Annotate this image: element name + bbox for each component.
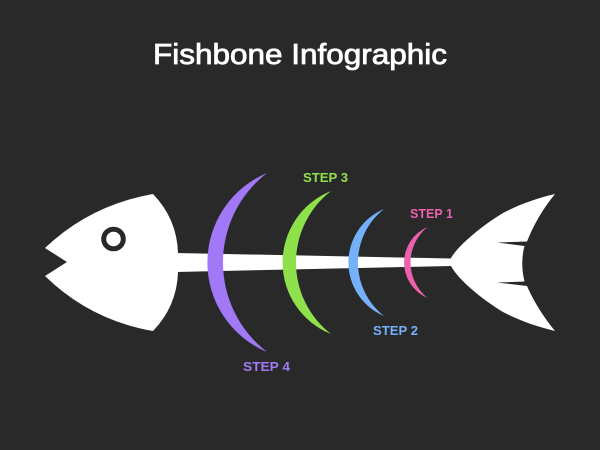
step 3 rib (283, 191, 331, 334)
step 4 label: STEP 4 (243, 359, 291, 374)
title: Fishbone Infographic (153, 39, 447, 71)
icon: fish eye (104, 229, 123, 249)
fish spine (176, 253, 452, 272)
step 1 rib (404, 227, 428, 298)
step 4 rib (207, 173, 267, 352)
step 2 rib (348, 209, 384, 316)
step 1 label: STEP 1 (410, 206, 453, 221)
step 2 label: STEP 2 (373, 323, 418, 338)
fish tail (451, 194, 555, 331)
fish head (45, 194, 178, 331)
step 3 label: STEP 3 (303, 170, 348, 185)
